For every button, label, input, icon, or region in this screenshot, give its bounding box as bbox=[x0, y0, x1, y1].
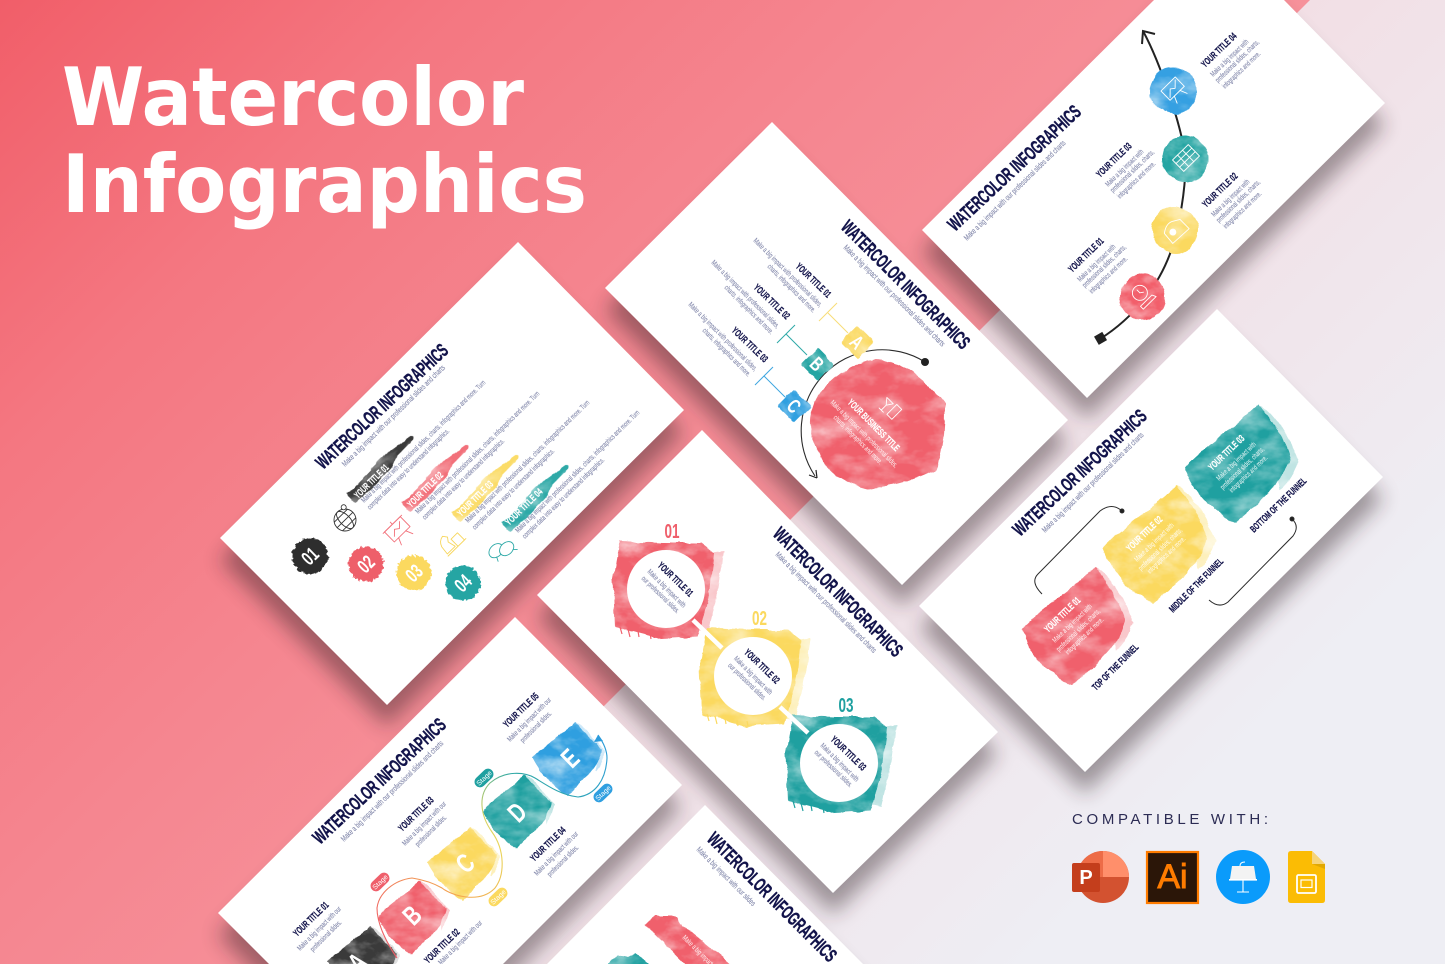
item titles and text bbox=[687, 236, 833, 378]
stage pills bbox=[368, 766, 615, 909]
stage letters: C bbox=[450, 848, 481, 879]
body text lines: Make a big impact with professional slides, charts, infographics and more. Turn bbox=[413, 389, 541, 515]
body text lines: complex data into easy to understand infographics. bbox=[365, 427, 451, 511]
title: Infographics bbox=[62, 138, 587, 231]
numbered splats: 04 bbox=[451, 570, 477, 597]
curved arrow bbox=[1100, 31, 1185, 339]
stage letters bbox=[342, 743, 585, 964]
title: Watercolor bbox=[62, 51, 525, 144]
red brush stroke bbox=[646, 916, 745, 964]
funnel text: professional slides, charts, bbox=[1054, 607, 1102, 653]
item titles and text: Make a big impact with professional slides, bbox=[710, 258, 782, 330]
slide heading: Make a big impact with our professional slides and charts bbox=[774, 550, 878, 655]
stage text: professional slides. bbox=[308, 918, 343, 953]
ring text: our professional slides. bbox=[726, 661, 768, 702]
stage text: YOUR TITLE 04 bbox=[528, 825, 569, 864]
slide heading bbox=[836, 217, 974, 354]
body text lines: Make a big impact with professional slides, charts, infographics and more. Turn bbox=[463, 398, 591, 524]
funnel text: YOUR TITLE 03 bbox=[1206, 433, 1247, 473]
panel: brush stroke list slide bbox=[220, 242, 684, 705]
slide heading: Make a big impact with our professional slides and charts bbox=[842, 243, 947, 348]
ring numbers: 02 bbox=[752, 608, 767, 630]
ring text: our professional slides. bbox=[640, 574, 682, 615]
stage text: YOUR TITLE 03 bbox=[396, 795, 437, 834]
end square bbox=[1094, 332, 1107, 345]
ring numbers bbox=[664, 521, 854, 717]
item text: Make a big impact with bbox=[1075, 242, 1117, 283]
ring text: Make a big impact with bbox=[646, 567, 688, 609]
ring text: Make a big impact with bbox=[819, 741, 861, 783]
ring text: YOUR TITLE 02 bbox=[741, 647, 782, 687]
item titles and text: Make a big impact with professional slides, bbox=[752, 236, 824, 309]
body text lines: complex data into easy to understand infographics. bbox=[420, 437, 506, 521]
stage text: Make a big impact with our bbox=[400, 799, 448, 847]
slide heading: WATERCOLOR INFOGRAPHICS bbox=[312, 340, 453, 474]
ring text: YOUR TITLE 03 bbox=[828, 734, 868, 774]
ring text: YOUR TITLE 01 bbox=[655, 560, 695, 600]
icon: award bbox=[878, 396, 902, 420]
watercolor circles bbox=[1119, 68, 1208, 320]
brush strokes with titles bbox=[344, 433, 575, 533]
body text lines: Make a big impact with professional slides, charts, infographics and more. Turn bbox=[359, 378, 487, 504]
wave path bbox=[377, 735, 607, 958]
item titles and text: YOUR TITLE 01 bbox=[793, 261, 833, 301]
item titles and text: charts, infographics and more. bbox=[766, 262, 818, 314]
body text lines: complex data into easy to understand infographics. bbox=[520, 456, 606, 540]
slide heading: Make a big impact with our professional slides and charts bbox=[962, 139, 1068, 242]
text inside blob: charts, infographics and more. bbox=[832, 413, 885, 466]
stage pills: Stage bbox=[490, 889, 508, 907]
slide heading bbox=[695, 829, 840, 964]
text inside blob bbox=[829, 397, 902, 469]
item text: infographics and more. bbox=[1221, 189, 1263, 230]
funnel text: YOUR TITLE 01 bbox=[1042, 595, 1083, 635]
numbered splats: 02 bbox=[354, 552, 380, 578]
item text: professional slides, charts, bbox=[1214, 178, 1262, 224]
panel: stages slide bbox=[218, 617, 682, 964]
ring 01 bbox=[613, 541, 723, 639]
teal brush stroke bbox=[606, 954, 662, 964]
numbered splats bbox=[292, 538, 480, 600]
icons in circles bbox=[1128, 77, 1199, 309]
body text lines: complex data into easy to understand infographics. bbox=[470, 447, 556, 531]
funnel text: infographics and more. bbox=[1063, 615, 1105, 656]
slide heading: WATERCOLOR INFOGRAPHICS bbox=[836, 217, 974, 354]
brush strokes with titles: YOUR TITLE 02 bbox=[405, 470, 446, 510]
icon: presentation easel bbox=[381, 513, 416, 548]
slide heading bbox=[1009, 406, 1151, 541]
funnel text: YOUR TITLE 02 bbox=[1124, 514, 1165, 554]
arc arrow bbox=[801, 350, 929, 478]
slide heading bbox=[312, 340, 453, 474]
stage text bbox=[291, 691, 580, 964]
numbered splats: 01 bbox=[298, 544, 324, 570]
item titles and text: YOUR TITLE 02 bbox=[751, 282, 792, 322]
item text: infographics and more. bbox=[1220, 49, 1262, 90]
item text: YOUR TITLE 03 bbox=[1094, 141, 1135, 180]
slide heading bbox=[309, 715, 451, 849]
funnel text: professional slides, charts, bbox=[1136, 526, 1184, 572]
slide heading: Make a big impact with our professional slides and charts bbox=[1040, 431, 1146, 534]
funnel blob: bottom bbox=[1185, 404, 1298, 522]
funnel text: Make a big impact with bbox=[1214, 440, 1258, 482]
stage letters: D bbox=[502, 797, 533, 828]
item text: infographics and more. bbox=[1115, 159, 1157, 200]
funnel text bbox=[1042, 433, 1269, 656]
connector lines bbox=[755, 303, 848, 397]
funnel stage labels: TOP OF THE FUNNEL bbox=[1090, 642, 1141, 693]
compatible with heading: COMPATIBLE WITH: bbox=[1072, 811, 1268, 828]
slide heading: Make a big impact with our professional slides and charts bbox=[340, 363, 447, 468]
funnel stage labels: BOTTOM OF THE FUNNEL bbox=[1248, 476, 1309, 535]
panel: business title circle slide bbox=[605, 122, 1068, 585]
letter squares: B bbox=[805, 352, 829, 376]
funnel text: infographics and more. bbox=[1227, 453, 1269, 494]
stage letters: E bbox=[555, 743, 585, 773]
stage blobs bbox=[327, 722, 605, 964]
stage text: YOUR TITLE 05 bbox=[501, 691, 542, 730]
slide heading: Make a big impact with our professional slides and charts bbox=[339, 739, 445, 843]
funnel stage labels: MIDDLE OF THE FUNNEL bbox=[1167, 556, 1226, 615]
letter squares bbox=[777, 325, 874, 423]
item titles and text: charts, infographics and more. bbox=[701, 326, 753, 378]
slide heading: WATERCOLOR INFOGRAPHICS bbox=[768, 524, 906, 662]
funnel blob: top bbox=[1021, 567, 1134, 685]
icon: Illustrator bbox=[1147, 852, 1198, 903]
body text lines bbox=[359, 378, 641, 540]
funnel connectors bbox=[1035, 506, 1296, 605]
funnel blob: middle bbox=[1103, 485, 1216, 603]
item text: YOUR TITLE 02 bbox=[1200, 171, 1241, 210]
stage pills: Stage bbox=[372, 874, 390, 892]
item text: infographics and more. bbox=[1087, 254, 1129, 295]
brush strokes with titles: YOUR TITLE 04 bbox=[503, 486, 546, 528]
item text: Make a big impact with bbox=[1208, 37, 1250, 78]
title bbox=[62, 51, 587, 231]
slide heading: Make a big impact with our slides bbox=[695, 845, 758, 908]
item text: professional slides, charts, bbox=[1080, 243, 1128, 289]
ring numbers: 03 bbox=[838, 695, 854, 717]
ring numbers: 01 bbox=[664, 521, 680, 543]
item titles and text: Make a big impact with professional slides, bbox=[687, 300, 759, 373]
stage letters: B bbox=[397, 900, 428, 931]
stage pills: Stage bbox=[595, 785, 613, 803]
brush strokes with titles: YOUR TITLE 01 bbox=[352, 462, 392, 501]
stage text: professional slides. bbox=[518, 709, 553, 744]
ring text: our professional slides. bbox=[813, 748, 855, 789]
icon: Illustrator: Ai bbox=[1157, 858, 1188, 896]
icon: chat bubbles bbox=[486, 534, 518, 566]
text inside blob: YOUR BUSINESS TITLE bbox=[845, 397, 902, 454]
big red watercolor blob bbox=[810, 359, 945, 489]
ring 02 bbox=[700, 628, 810, 726]
body text lines: Make a big impact with professional slides, charts, infographics and more. Turn bbox=[513, 408, 641, 534]
panel: timeline curve slide bbox=[922, 0, 1385, 398]
ring text bbox=[640, 560, 868, 789]
ring 03 bbox=[786, 715, 896, 813]
slide heading: WATERCOLOR INFOGRAPHICS bbox=[1009, 406, 1151, 541]
funnel text: Make a big impact with bbox=[1132, 521, 1176, 563]
slide heading: WATERCOLOR INFOGRAPHICS bbox=[309, 715, 451, 849]
item text: professional slides, charts, bbox=[1108, 148, 1156, 194]
funnel text: Make a big impact with bbox=[1050, 602, 1094, 644]
item text: Make a big impact with bbox=[1209, 177, 1251, 218]
funnel text: infographics and more. bbox=[1145, 534, 1187, 575]
item text bbox=[1066, 31, 1263, 295]
item titles and text: YOUR TITLE 03 bbox=[729, 325, 770, 365]
panel: numbered rings slide bbox=[537, 430, 998, 893]
item text: YOUR TITLE 04 bbox=[1199, 31, 1240, 70]
brush strokes with titles: YOUR TITLE 03 bbox=[455, 479, 496, 519]
white links between rings bbox=[693, 620, 808, 733]
slide heading: WATERCOLOR INFOGRAPHICS bbox=[944, 102, 1086, 236]
icon: Google Slides bbox=[1288, 851, 1325, 903]
funnel text: professional slides, charts, bbox=[1218, 445, 1266, 491]
icon: chess pieces bbox=[435, 526, 466, 556]
item text: Make a big impact with bbox=[1103, 147, 1145, 188]
icon: Keynote bbox=[1216, 850, 1270, 904]
item text: YOUR TITLE 01 bbox=[1066, 236, 1107, 275]
slide heading bbox=[944, 102, 1086, 242]
panel: funnel slide bbox=[919, 309, 1383, 772]
ring text: Make a big impact with bbox=[732, 654, 775, 696]
stage pills: Stage bbox=[476, 770, 494, 788]
text inside blob: Make a big impact with professional slides, bbox=[829, 398, 900, 469]
letter squares: A bbox=[845, 330, 869, 354]
item titles and text: charts, infographics and more. bbox=[723, 283, 776, 336]
panel: bottom brush slide bbox=[547, 805, 863, 964]
stage text: Make a big impact with our bbox=[505, 695, 553, 743]
stage text: YOUR TITLE 01 bbox=[291, 900, 332, 939]
stage text: Make a big impact with our bbox=[295, 904, 343, 952]
stage text: professional slides. bbox=[413, 813, 448, 848]
icon: globe bbox=[328, 503, 361, 536]
stage text: Make a big impact with our bbox=[532, 829, 580, 877]
numbered splats: 03 bbox=[402, 561, 428, 587]
letter squares: C bbox=[782, 394, 806, 418]
icon: PowerPoint: P bbox=[1079, 867, 1093, 889]
stage text: professional slides. bbox=[545, 843, 580, 878]
item text: professional slides, charts, bbox=[1213, 38, 1261, 84]
icon: PowerPoint bbox=[1072, 851, 1129, 903]
funnel stage labels bbox=[1090, 476, 1309, 693]
slide heading bbox=[768, 524, 906, 662]
